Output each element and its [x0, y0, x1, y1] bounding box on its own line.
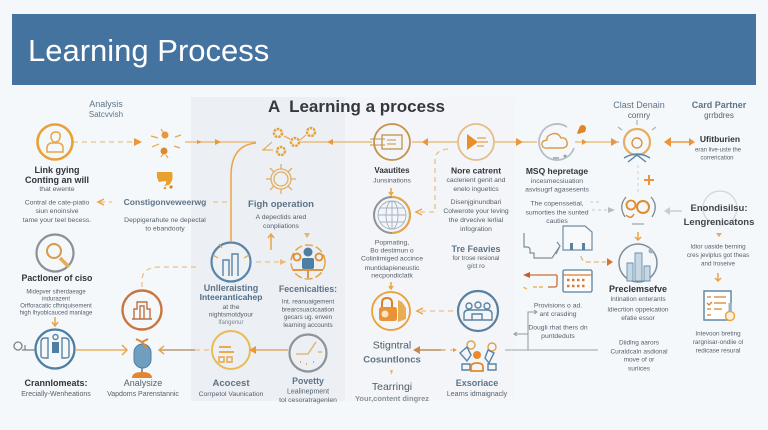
text block: Nore catrent: Disenjginundbari — [451, 199, 502, 206]
text block: Acocest — [199, 378, 264, 398]
dashed arrow: to refresh icon — [590, 202, 615, 213]
icon: folder and network path — [524, 226, 592, 258]
dashed arrow: city circle to people icon — [256, 259, 286, 265]
text block: Unlleraisting — [200, 283, 262, 326]
text block: Preclemsefve: efatie essor — [621, 315, 656, 322]
arrow: small down — [390, 370, 393, 375]
arrow: down to globe — [389, 188, 393, 195]
arrow: down to orange circle — [389, 282, 393, 289]
text block: Intevoon: redicase resural — [696, 348, 740, 354]
dashed path: to globe — [416, 149, 448, 215]
icon: key and blue circle — [14, 330, 74, 368]
icon: city circle — [619, 244, 657, 282]
text block: Pactloner of ciso: Pactloner of ciso — [22, 273, 93, 283]
icon: orange gear lock — [615, 120, 656, 162]
text block: Stigntral: Stigntral — [373, 340, 411, 352]
icon: person circle — [38, 124, 72, 160]
text block: Ufitburien: eran live-uste the — [695, 148, 742, 154]
heading: Card Partner — [692, 100, 747, 120]
icon: team circle — [458, 291, 498, 331]
text block: Preclemsefve: Diidlng aarors — [619, 340, 660, 346]
text block: Constigonveweerwg — [124, 197, 206, 232]
icon: gears cluster — [262, 128, 315, 155]
text block: Povetty: Povetty — [292, 376, 324, 386]
text block: Preclemsefve: Curaldcaln asdional — [610, 348, 668, 356]
text block: Intevoon: rargnisar-ondiie ol — [693, 339, 743, 346]
text block: Nore catrent: infogration — [460, 226, 492, 233]
text block: Link gying: Conting an will — [25, 175, 89, 185]
top connector lines — [73, 138, 618, 241]
arrows above people icon — [268, 233, 310, 250]
text block: Tre Feavies: for trose resional — [453, 255, 499, 262]
text block: Provisions: puntdeduts — [541, 333, 575, 340]
dashed arrow: to orange circle — [417, 308, 458, 314]
text block: Pactloner of ciso: high lhyoblcauced manlage — [20, 310, 93, 316]
double arrow — [664, 137, 695, 147]
text block: Povetty: tol cesoratragenlen — [279, 397, 337, 404]
text block: Figh operation: A depectids ared — [256, 214, 307, 221]
icon: burst — [151, 129, 181, 158]
text block: MSQ hepretage: cauties — [546, 218, 568, 225]
dashed arrow: folder to city — [581, 256, 613, 266]
text block: Exsoriace: Learns idmaignacly — [447, 391, 508, 398]
text block: Preclemsefve — [607, 284, 669, 372]
arrow: to Stigntral — [413, 346, 445, 354]
text block: Popmating — [361, 240, 423, 280]
text block: Fecenicalties: learning accounts — [283, 322, 333, 329]
text block: MSQ hepretage: sumorties the sunted — [525, 210, 589, 216]
icon: orange building circle — [122, 290, 162, 330]
connector: lower center lines — [505, 310, 598, 350]
arrow: blue circle to microphone — [75, 345, 127, 355]
text block: Crannlomeats: Crannlomeats: — [24, 378, 88, 388]
text block: Link gying: that ewente — [39, 186, 75, 193]
text block: Vaautites: Vaautites — [374, 166, 410, 175]
icon: orange lock circle — [372, 292, 410, 330]
text block: Link gying — [23, 165, 91, 224]
text block: Link gying: tame your teel becess. — [23, 217, 91, 224]
heading: Analysis — [89, 99, 123, 119]
faint circle — [703, 191, 737, 225]
text block: Nore catrent: the drvecive lerlial — [449, 217, 504, 224]
arrow: yellow circle to microphone — [159, 346, 212, 354]
text block: Nore catrent: enelo inguetics — [453, 186, 499, 193]
icon: play circle — [458, 124, 494, 160]
text block: Ufitburien: Ufitburien — [700, 134, 740, 144]
text block: Constigonveweerwg: Deppigerahute ne depectal — [124, 217, 206, 224]
text block: Nore catrent: caclerient genit and — [447, 177, 506, 184]
panel: middle left shaded column — [191, 97, 345, 401]
text block: Nore catrent: Colwerote your leving — [443, 208, 509, 215]
heading: Card Partner: grrbdres — [704, 111, 734, 120]
text block: Enondisilsu — [684, 203, 754, 228]
text block: Provisions: Provisions o ad. — [534, 302, 582, 310]
text block: Constigonveweerwg: to ebandooty — [145, 226, 185, 232]
arrow: small down right — [716, 233, 722, 237]
text block: Unlleraisting: at the — [222, 304, 240, 311]
text block: MSQ hepretage: MSQ hepretage — [526, 166, 588, 176]
text block: Pactloner of ciso: Orfforacatic cfhriquisement — [20, 304, 92, 310]
icon: calendar — [563, 270, 592, 292]
text block: Fecenicalties: brearcsuacicaation — [282, 306, 335, 314]
text block: Preclemsefve: move of or — [624, 356, 655, 364]
icon: sun gear — [266, 164, 296, 194]
text block: Pactloner of ciso: Midepver siherdaeage — [26, 290, 86, 296]
text block: Popmating: necpondiclatk — [371, 272, 413, 280]
text block: Stigntral: Cosuntloncs — [363, 354, 421, 366]
icon: checklist — [704, 291, 734, 320]
icon: microphone person — [132, 339, 152, 378]
text block: Unlleraisting: Unlleraisting — [204, 283, 258, 293]
text block: MSQ hepretage — [525, 166, 590, 225]
text block: Stigntral — [355, 340, 429, 403]
text block: Unlleraisting: lfangenur — [218, 320, 244, 326]
text block: Link gying: Contral de cate-piatio — [25, 200, 90, 206]
text block: Figh operation — [248, 199, 314, 230]
text block: Popmating: Popmating, — [375, 240, 409, 246]
text block: Provisions — [528, 302, 588, 340]
text block: Tre Feavies — [451, 244, 501, 270]
icon: gray person circle — [36, 234, 74, 272]
text block: Figh operation: Figh operation — [248, 199, 314, 210]
icon: cloud circle — [539, 124, 586, 160]
dashed arrow: to expert group — [441, 348, 457, 352]
text block: MSQ hepretage: The copenssetial, — [530, 200, 584, 208]
icon: question mark — [157, 172, 173, 189]
heading: A Learning a process: A Learning a process — [268, 97, 445, 116]
panel: middle right shaded column — [345, 97, 515, 401]
header banner: Learning Process — [28, 33, 269, 68]
text block: Link gying: siun enoinsive — [35, 208, 79, 215]
text block: Provisions: ant crasding — [539, 311, 577, 318]
heading: Clast Denain: cornry — [628, 111, 650, 120]
text block: Intevoon: Intevoon breting — [695, 330, 741, 338]
dashed arrow: building to blue circle — [142, 267, 200, 287]
icon: refresh people — [622, 197, 655, 224]
text block: Unlleraisting: Inteeranticahep — [200, 292, 262, 302]
text block: Acocest: Corrpetol Vaunication — [199, 391, 264, 398]
icon: globe — [374, 197, 410, 233]
text block: Preclemsefve: ldiecrtion oppeication — [607, 306, 669, 314]
arrow: down to checklist — [715, 273, 721, 281]
text block: Povetty: Lealinepment — [287, 388, 329, 396]
text block: Preclemsefve: Preclemsefve — [609, 284, 667, 294]
text block: Intevoon — [693, 330, 743, 354]
text block: Analysize — [107, 378, 179, 398]
text block: Fecenicalties: gecars ug. enven — [284, 314, 333, 321]
text block: Tre Feavies: Tre Feavies — [451, 244, 501, 254]
text block: Vaautites: Junsinations — [373, 178, 411, 184]
text block: Ufitburien — [695, 134, 742, 162]
heading: Card Partner: Card Partner — [692, 100, 747, 110]
heading: Analysis: Analysis — [89, 99, 123, 109]
plus and dashed vertical — [638, 165, 654, 192]
text block: Pactloner of ciso: indurazent — [42, 296, 70, 302]
text block: Popmating: Colinlimiged accince — [361, 256, 423, 262]
text block: MSQ hepretage: asvisugrf agasesents — [525, 186, 590, 194]
text block: Popmating: Bo destimun o — [370, 248, 414, 254]
header banner — [12, 14, 756, 85]
text block: Fecenicalties: Int. reanuaigement — [282, 298, 335, 306]
arrow: left to refresh icon — [664, 207, 682, 215]
text block: Enondisilsu: Lengrenicatons — [684, 217, 754, 228]
text block: Ufitburien: correrication — [700, 156, 734, 162]
heading: Analysis: Satcvvish — [89, 110, 123, 119]
text block: Exsoriace: Exsoriace — [456, 378, 498, 388]
text block: Fecenicalties: Fecenicalties: — [279, 284, 337, 294]
text block: MSQ hepretage: incesmecsiuation — [531, 178, 583, 185]
text block: Povetty — [279, 376, 337, 404]
text block: Analysize: Analysize — [124, 378, 162, 388]
text block: Figh operation: conpliations — [263, 223, 300, 230]
arrow: down to blue circle — [52, 317, 58, 326]
arrow: calendar return — [523, 272, 557, 289]
icon: document circle — [370, 124, 410, 160]
icon: blue city circle — [212, 242, 250, 282]
heading: Clast Denain — [613, 100, 665, 120]
text block: Pactloner of ciso — [20, 273, 93, 316]
icon: people badge — [291, 245, 325, 279]
arrow: gauge to yellow circle — [249, 346, 288, 354]
text block: Tre Feavies: g/ct ro — [467, 263, 485, 270]
text block: Vaautites — [373, 166, 411, 184]
text block: Nore catrent — [443, 166, 509, 233]
text block: Stigntral: Tearringi — [372, 381, 412, 393]
text block: Idior — [687, 244, 749, 268]
dashed arrows beside Constigonveweerwg — [98, 199, 228, 205]
text block: Nore catrent: Nore catrent — [451, 166, 501, 176]
text block: Enondisilsu: Enondisilsu: — [690, 203, 748, 214]
icon: yellow document circle — [212, 331, 250, 369]
text block: Preclemsefve: suriices — [628, 366, 651, 372]
text block: Popmating: muntidapieneustic — [365, 265, 420, 272]
heading: Clast Denain: Clast Denain — [613, 100, 665, 110]
text block: Idior: and lroseive — [701, 260, 735, 268]
arrow: down to city — [635, 232, 641, 240]
text block: Idior: Idior uaside berning — [690, 244, 746, 250]
text block: Stigntral: Your,content dingrez — [355, 394, 429, 403]
text block: Exsoriace — [447, 378, 508, 398]
text block: Preclemsefve: Intination enterants — [610, 296, 666, 303]
text block: Crannlomeats: Erecially-Wenheations — [21, 391, 91, 398]
text block: Acocest: Acocest — [213, 378, 250, 389]
icon: gray gauge circle — [290, 334, 326, 372]
text block: Analysize: Vapdoms Parenstannic — [107, 391, 179, 398]
text block: Link gying: Link gying — [34, 165, 80, 175]
text block: Idior: cres jeviplus got theas — [687, 252, 749, 259]
text block: Unlleraisting: nightsmotdyour — [209, 312, 254, 318]
text block: Fecenicalties — [279, 284, 337, 329]
text block: Provisions: Dougli rhat thers dn — [528, 324, 588, 332]
text block: Crannlomeats — [21, 378, 91, 398]
text block: Constigonveweerwg: Constigonveweerwg — [124, 197, 206, 207]
icon: expert group — [460, 341, 496, 371]
